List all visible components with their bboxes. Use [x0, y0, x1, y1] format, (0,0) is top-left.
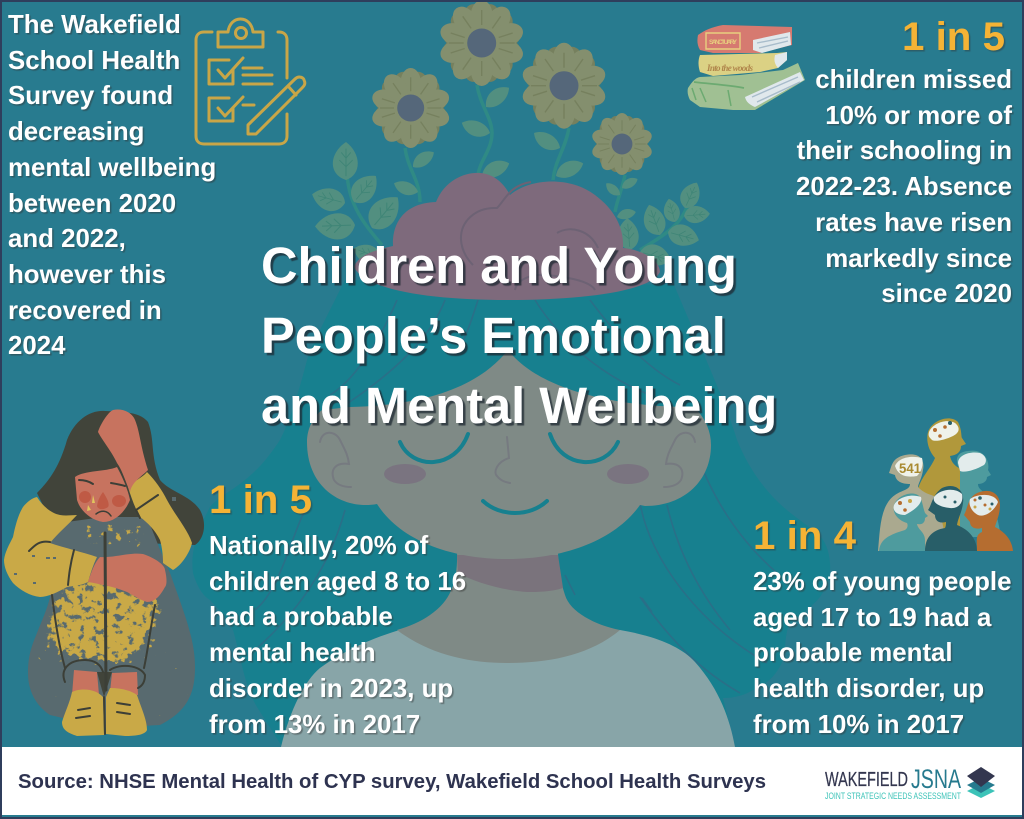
flowers — [370, 0, 654, 175]
intro text: school health survey: decreasing — [8, 118, 144, 146]
icon: group of heads with brains: 541 — [899, 460, 921, 476]
text: absence description: their schooling in — [797, 137, 1012, 165]
text: national prevalence: from 13% in 2017 — [209, 711, 420, 739]
intro text: school health survey: Survey found — [8, 82, 173, 110]
number: 1 in 5: 1 in 5 — [209, 477, 312, 522]
girl jacket: right sleeve — [128, 472, 192, 570]
text: national prevalence: had a probable — [209, 603, 393, 631]
text: absence description: 2022-23. Absence — [796, 173, 1012, 201]
text: national prevalence — [209, 532, 467, 739]
title — [261, 237, 777, 436]
icon: clipboard checklist — [196, 19, 305, 144]
trousers paint speckles — [38, 524, 188, 716]
plant stems and leaves — [309, 81, 711, 270]
text: young people prevalence: 23% of young people — [753, 568, 1011, 596]
girl arm and hand on head — [98, 409, 148, 492]
shirt — [281, 630, 735, 747]
text: absence description: children missed — [815, 66, 1012, 94]
text: national prevalence: children aged 8 to 16 — [209, 568, 466, 596]
text: young people prevalence: aged 17 to 19 had a — [753, 604, 991, 632]
logo: Wakefield JSNA: JSNA — [911, 764, 961, 794]
intro text: school health survey: mental wellbeing — [8, 154, 216, 182]
text: national prevalence: mental health — [209, 639, 376, 667]
brain — [354, 173, 660, 300]
text: national prevalence: Nationally, 20% of — [209, 532, 428, 560]
girl jacket: left sleeve — [4, 497, 97, 597]
stat: 1 in 5 nationally — [209, 477, 467, 739]
girl face — [75, 467, 130, 522]
icon: crying girl — [4, 409, 204, 736]
logo: Wakefield JSNA: WAKEFIELD — [825, 769, 908, 791]
girl trousers — [28, 517, 195, 728]
neck shadow — [457, 555, 563, 592]
logo: Wakefield JSNA — [825, 764, 995, 802]
text: young people prevalence — [753, 568, 1012, 739]
text: young people prevalence: from 10% in 2017 — [753, 711, 964, 739]
intro text: school health survey: 2024 — [8, 332, 66, 360]
icon: stack of books: Into the woods — [706, 63, 753, 73]
girl ankles — [72, 670, 138, 695]
head and face — [307, 350, 711, 559]
number: 1 in 5: 1 in 5 — [902, 14, 1005, 59]
girl arm and hand on knees — [88, 554, 166, 602]
title: Children and Young — [261, 237, 737, 294]
girl hair — [37, 411, 204, 545]
logo: Wakefield JSNA: JOINT STRATEGIC NEEDS ASSESSMENT — [825, 791, 961, 802]
text: absence description: 10% or more of — [825, 102, 1012, 130]
girl shoes — [62, 688, 147, 736]
source line: Source: NHSE Mental Health of CYP survey, Wakefield School Health Surveys — [18, 771, 766, 793]
stat: 1 in 4 young people — [753, 513, 1012, 739]
intro text: school health survey — [8, 11, 216, 360]
intro text: school health survey: recovered in — [8, 297, 162, 325]
stat: 1 in 5 absence — [796, 14, 1014, 308]
text: young people prevalence: probable mental — [753, 639, 953, 667]
text: young people prevalence: health disorder, up — [753, 675, 984, 703]
intro text: school health survey: between 2020 — [8, 190, 176, 218]
text: absence description: markedly since — [825, 245, 1012, 273]
intro text: school health survey: The Wakefield — [8, 11, 181, 39]
girl linework — [29, 480, 158, 734]
number: 1 in 4: 1 in 4 — [753, 513, 856, 558]
text: absence description — [796, 66, 1014, 308]
intro text: school health survey: however this — [8, 261, 166, 289]
intro text: school health survey: and 2022, — [8, 225, 126, 253]
text: absence description: rates have risen — [815, 209, 1012, 237]
neck — [397, 550, 620, 663]
intro text: school health survey: School Health — [8, 47, 180, 75]
text: national prevalence: disorder in 2023, up — [209, 675, 453, 703]
title: and Mental Wellbeing — [261, 377, 777, 434]
icon: stack of books — [688, 25, 805, 110]
icon: group of heads with brains — [878, 418, 1013, 551]
footer band — [2, 747, 1022, 815]
hair: long teal hair behind head — [192, 280, 830, 748]
title: People’s Emotional — [261, 307, 726, 364]
text: absence description: since 2020 — [881, 280, 1012, 308]
icon: stack of books: SANCTUARY — [709, 39, 738, 46]
